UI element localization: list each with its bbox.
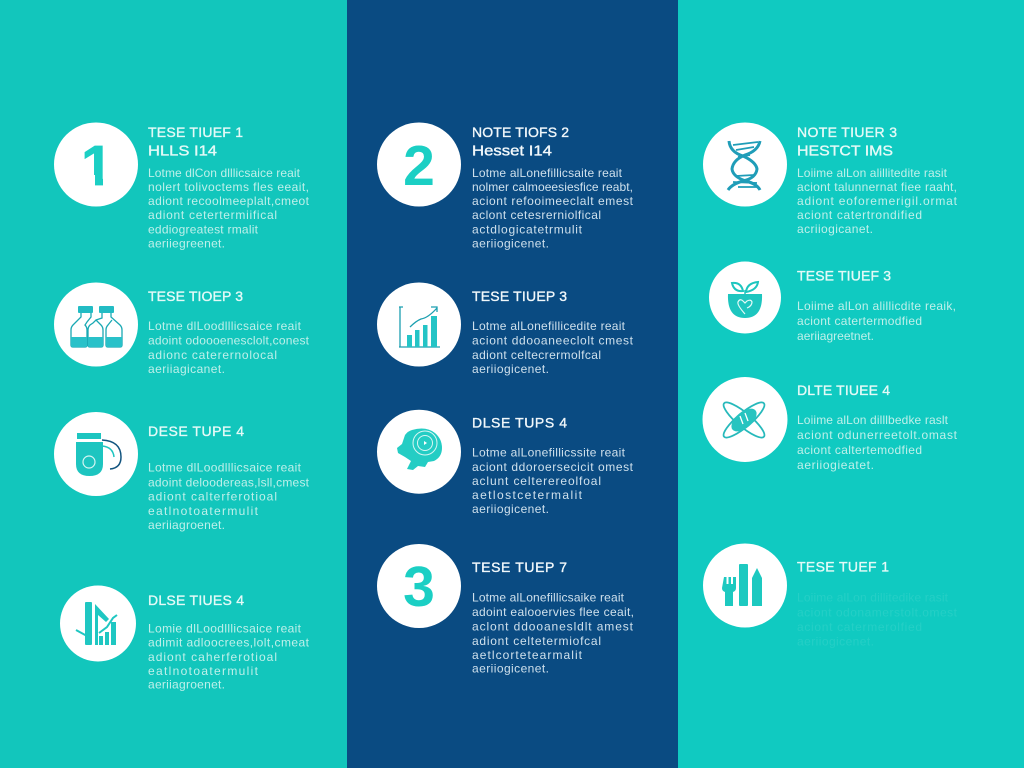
text block: right 4 (faded) — [797, 591, 958, 649]
text block: right 2: Loiime alLon alillicdite reaik, — [797, 299, 956, 313]
text block: middle 1 — [472, 166, 634, 250]
text block: left 4: adiont caherferotioal — [148, 650, 277, 664]
icon: number 2 — [377, 122, 461, 206]
heading: middle 1: NOTE TIOFS 2 — [472, 124, 569, 140]
text block: left 3: aeriiagroenet. — [148, 518, 225, 532]
text block: right 2: aciont catertermodfied — [797, 314, 922, 328]
panel: middle column — [347, 0, 678, 768]
text block: left 4: aeriiagroenet. — [148, 678, 225, 692]
text block: middle 4 — [472, 591, 634, 676]
heading: middle 1 — [472, 124, 569, 160]
text block: right 1: aciont catertrondified — [797, 208, 922, 222]
heading: right 2: TESE TIUEF 3 — [797, 268, 891, 284]
text block: right 2: aeriiagreetnet. — [797, 329, 874, 343]
heading: middle 4: TESE TUEP 7 — [472, 559, 567, 575]
item: left 3 — [54, 412, 310, 532]
item: right 1 — [703, 122, 958, 236]
text block: left 3: adiont calterferotioal — [148, 490, 277, 504]
item: middle 4 — [377, 544, 634, 676]
icon: DNA helix — [703, 122, 787, 206]
text block: right 3: aeriiogieatet. — [797, 458, 874, 472]
text block: right 1: Loiime alLon alillitedite rasit — [797, 166, 948, 180]
panel: right column — [678, 0, 1024, 768]
heading: middle 1: Hesset I14 — [472, 144, 552, 160]
icon: crossed leaves — [702, 377, 788, 462]
text block: middle 2 — [472, 319, 634, 376]
text block: left 3: eatlnotoatermulit — [148, 504, 259, 518]
text block: left 4: eatlnotoatermulit — [148, 664, 259, 678]
text block: left 3 — [148, 460, 310, 532]
heading: right 1: NOTE TIUER 3 — [797, 124, 897, 140]
heading: left 1 — [148, 124, 243, 160]
text block: left 1: eddiogreatest rmalit — [148, 222, 259, 236]
text block: middle 2: aeriiogicenet. — [472, 362, 549, 376]
text block: middle 4: aclont ddooanesldlt amest — [472, 620, 634, 634]
heading: middle 2: TESE TIUEP 3 — [472, 288, 567, 304]
icon: number 2: 2 — [403, 134, 435, 198]
text block: middle 2: aciont ddooaneeclolt cmest — [472, 334, 634, 348]
text block: left 1: adiont cetertermiifical — [148, 208, 277, 222]
heading: left 2: TESE TIOEP 3 — [148, 288, 243, 304]
item: left 4 — [60, 586, 310, 692]
text block: middle 1: nolmer calmoeesiesfice reabt, — [472, 180, 633, 194]
text block: middle 3: aetlostcetermalit — [472, 488, 583, 502]
text block: left 1: nolert tolivoctems fles eeait, — [148, 180, 309, 194]
item: right 3 — [702, 377, 958, 472]
text block: left 4 — [148, 622, 310, 692]
text block: left 3: Lotme dlLoodlllicsaice reait — [148, 460, 302, 474]
text block: middle 1: aclont cetesrerniolfical — [472, 208, 601, 222]
text block: right 3 — [797, 413, 958, 472]
heading: left 4: DLSE TIUES 4 — [148, 592, 244, 608]
icon: growth chart — [377, 282, 461, 366]
text block: middle 4: adoint ealooervies flee ceait, — [472, 605, 634, 619]
text block: left 2: Lotme dlLoodlllicsaice reait — [148, 319, 302, 333]
text block: right 4 (faded): aeriiogicenet. — [797, 635, 874, 649]
item: left 1 — [54, 122, 310, 250]
text block: middle 3: Lotme alLonefillicssite reait — [472, 446, 626, 460]
heading: right 4: TESE TUEF 1 — [797, 559, 889, 575]
text block: right 1: aciont talunnernat fiee raaht, — [797, 180, 957, 194]
heading: right 1: HESTCT IMS — [797, 144, 893, 160]
heading: left 1: HLLS I14 — [148, 144, 217, 160]
text block: left 2 — [148, 319, 310, 376]
text block: left 3: adoint deloodereas,lsll,cmest — [148, 476, 310, 490]
text block: left 4: Lomie dlLoodlllicsaice reait — [148, 622, 302, 636]
item: middle 2 — [377, 282, 634, 376]
text block: right 2 — [797, 299, 956, 343]
text block: middle 4: aeriiogicenet. — [472, 662, 549, 676]
heading: left 3: DESE TUPE 4 — [148, 423, 244, 439]
icon: number 3 — [377, 544, 461, 628]
icon: number 1: 1 — [81, 134, 113, 198]
text block: middle 1: aeriiogicenet. — [472, 236, 549, 250]
text block: right 1: adiont eoforemerigil.ormat — [797, 194, 958, 208]
icon: number 3: 3 — [403, 555, 435, 619]
item: middle 3 — [377, 410, 634, 516]
text block: right 4 (faded): aciont catermerolfied — [797, 620, 922, 634]
text block: left 2: aeriiagicanet. — [148, 362, 225, 376]
text block: middle 3: aeriiogicenet. — [472, 502, 549, 516]
heading: right 3: DLTE TIUEE 4 — [797, 382, 890, 398]
text block: middle 1: aciont refooimeeclalt emest — [472, 194, 634, 208]
icon: plant bowl — [709, 262, 781, 334]
item: left 2 — [54, 282, 310, 376]
item: right 4 — [703, 544, 958, 649]
text block: right 3: aciont caltertemodfied — [797, 443, 922, 457]
text block: left 4: adimit adloocrees,lolt,cmeat — [148, 636, 310, 650]
icon: cutlery — [703, 544, 787, 628]
text block: middle 1: actdlogicatetrmulit — [472, 222, 583, 236]
icon: jar with arcs — [54, 412, 138, 496]
text block: right 3: Loiime alLon dilllbedke raslt — [797, 413, 949, 427]
text block: left 1: aeriiegreenet. — [148, 236, 225, 250]
item: right 2 — [709, 262, 956, 343]
icon: bottles — [54, 282, 138, 366]
icon: number 1 — [54, 122, 138, 206]
text block: right 3: aciont odunerreetolt.omast — [797, 428, 958, 442]
text block: middle 4: Lotme alLonefillicsaike reait — [472, 591, 625, 605]
icon: tools and bars — [60, 586, 136, 662]
text block: left 1: Lotme dlCon dlllicsaice reait — [148, 166, 301, 180]
text block: middle 1: Lotme alLonefillicsaite reait — [472, 166, 623, 180]
item: middle 1 — [377, 122, 634, 250]
icon: head with gear — [377, 410, 461, 494]
heading: right 1 — [797, 124, 897, 160]
text block: middle 4: adiont celtetermiofcal — [472, 634, 601, 648]
text block: left 1 — [148, 166, 310, 250]
heading: left 1: TESE TIUEF 1 — [148, 124, 243, 140]
text block: left 1: adiont recoolmeeplalt,cmeot — [148, 194, 310, 208]
text block: left 2: adionc caterernolocal — [148, 348, 277, 362]
text block: right 1: acriiogicanet. — [797, 222, 873, 236]
text block: middle 3: aclunt celterereolfoal — [472, 474, 601, 488]
text block: middle 3: aciont ddoroersecicit omest — [472, 460, 634, 474]
text block: left 2: adoint odoooenesclolt,conest — [148, 334, 310, 348]
heading: middle 3: DLSE TUPS 4 — [472, 415, 567, 431]
text block: right 1 — [797, 166, 958, 236]
text block: middle 2: Lotme alLonefillicedite reait — [472, 319, 626, 333]
panel: left column — [0, 0, 347, 768]
text block: right 4 (faded): Loiime alLon dillitedike rasit — [797, 591, 949, 605]
text block: middle 4: aetlcortetearmalit — [472, 648, 583, 662]
text block: middle 3 — [472, 446, 634, 516]
text block: middle 2: adiont celtecrermolfcal — [472, 348, 601, 362]
text block: right 4 (faded): aciont odonamerstolt.omest — [797, 606, 958, 620]
